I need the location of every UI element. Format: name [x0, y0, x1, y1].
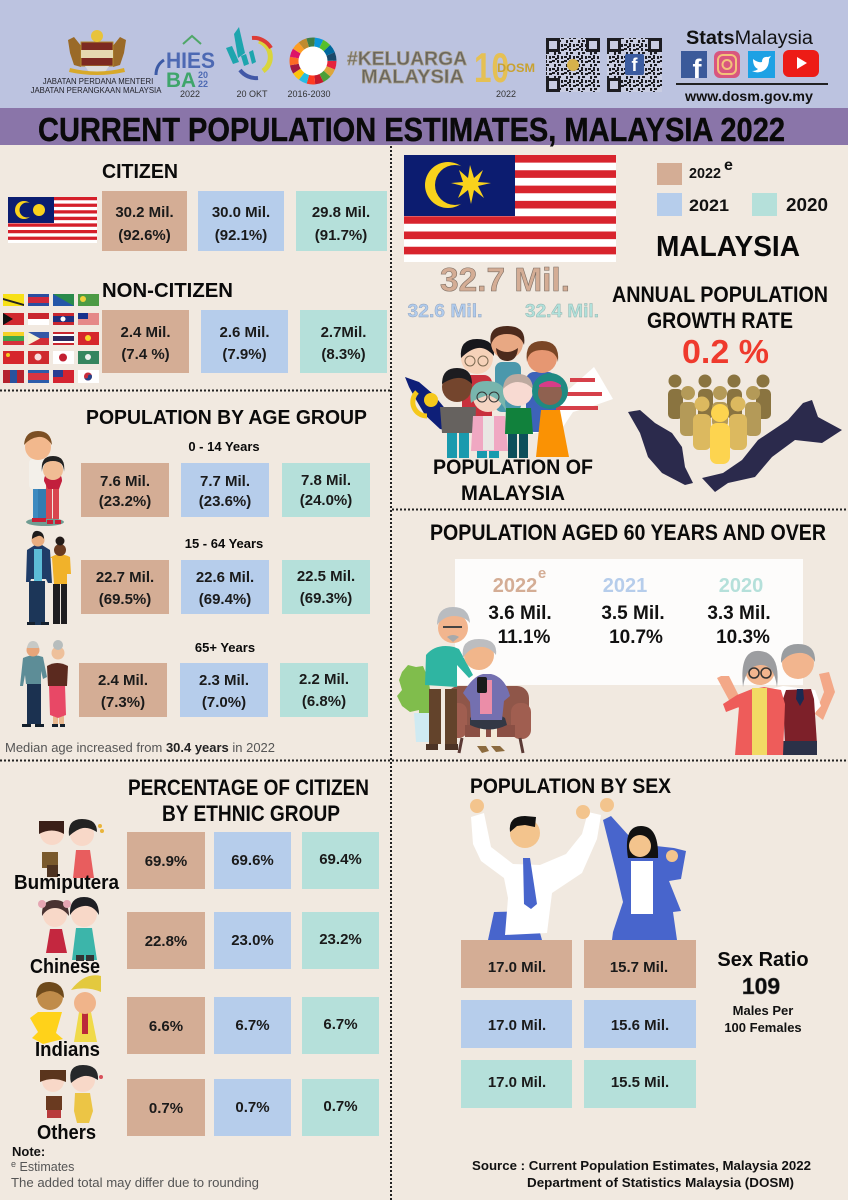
illustration: man cheering: [470, 799, 601, 940]
male 2020: 17.0 Mil.: [488, 1074, 546, 1091]
chinese 2020: 23.2%: [319, 931, 362, 948]
male 2021: 17.0 Mil.: [488, 1017, 546, 1034]
notes: e: [11, 1159, 16, 1169]
indians 2020: 6.7%: [323, 1016, 358, 1033]
logo: Keluarga Malaysia: #KELUARGA: [347, 49, 467, 70]
icon: bumiputera children: [39, 819, 104, 878]
2020 seniors figures: 2020: [719, 575, 763, 597]
non-citizen 2020: 2.7Mil.: [321, 324, 366, 341]
15-64 2020: [282, 560, 370, 614]
QR code: [546, 38, 600, 92]
sex ratio: 109: [742, 973, 780, 999]
notes: [11, 1144, 259, 1190]
female 2020: 15.5 Mil.: [611, 1074, 669, 1091]
bumiputera 2020: [302, 832, 379, 889]
female 2022: [584, 940, 696, 988]
icon: facebook: [681, 51, 707, 84]
logo: HIES BA 2022: BA: [166, 69, 196, 92]
back row: [461, 326, 558, 432]
non-citizen 2020: (8.3%): [321, 346, 366, 363]
2021 seniors figures: [601, 575, 665, 648]
front row: [440, 368, 569, 458]
female 2020: [584, 1060, 696, 1108]
caption: population of malaysia: [433, 456, 593, 505]
15-64 2021: (69.4%): [199, 591, 251, 608]
0-14 2021: 7.7 Mil.: [200, 473, 250, 490]
label: indians: Indians: [35, 1039, 100, 1061]
citizen 2022: 30.2 Mil.: [115, 204, 174, 221]
2021 seniors figures: 10.7%: [609, 627, 663, 648]
bumiputera 2022: [127, 832, 205, 889]
source: Department of Statistics Malaysia (DOSM): [527, 1176, 794, 1190]
citizen 2021: [198, 191, 284, 251]
logo: DOSM 10 years: 10: [474, 44, 509, 91]
heading: BY ETHNIC GROUP: [162, 801, 340, 826]
label: bumiputera: Bumiputera: [14, 872, 120, 894]
citizen 2021: (92.1%): [215, 227, 267, 244]
agency name: JABATAN PERDANA MENTERI: [43, 77, 153, 86]
0-14 2021: [181, 463, 269, 517]
label: others: Others: [37, 1122, 96, 1144]
0-14 2022: (23.2%): [99, 493, 151, 510]
heading: annual growth rate: GROWTH RATE: [647, 308, 793, 333]
2021 seniors figures: 3.5 Mil.: [601, 603, 665, 624]
65+ 2020: [280, 663, 368, 717]
icon: instagram: [714, 51, 740, 78]
legend: e: [724, 157, 733, 174]
15-64 2020: (69.3%): [300, 590, 352, 607]
label: 15-64 years: 15 - 64 Years: [185, 536, 263, 551]
heading: age group: POPULATION BY AGE GROUP: [86, 407, 367, 429]
male 2022: 17.0 Mil.: [488, 959, 546, 976]
female 2021: [584, 1000, 696, 1048]
icon: twitter: [748, 51, 775, 78]
agency name: JABATAN PERANGKAAN MALAYSIA: [31, 86, 162, 95]
growth rate value: 0.2 %: [682, 333, 769, 370]
logo: DOSM 10 years: DOSM: [497, 61, 535, 75]
15-64 2022: (69.5%): [99, 591, 151, 608]
icon: chinese children: [38, 897, 99, 961]
median age note: Median age increased from 30.4 years in 2022: [5, 741, 275, 755]
icon: seniors: [20, 640, 68, 727]
legend: 2021: [689, 196, 729, 215]
citizen 2022: [102, 191, 187, 251]
0-14 2020: [282, 463, 370, 517]
logo: DOSM 10 years: [474, 44, 535, 99]
15-64 2020: 22.5 Mil.: [297, 568, 355, 585]
15-64 2021: [181, 560, 269, 614]
heading: non-citizen: NON-CITIZEN: [102, 280, 233, 302]
logo: HIES BA 2022: HIES: [166, 48, 215, 73]
panel: population by sex: [461, 775, 809, 1108]
panel: population by age group: [5, 407, 370, 755]
notes: Estimates: [16, 1160, 74, 1174]
social block: [676, 28, 828, 104]
2022 seniors figures: [488, 565, 552, 648]
non-citizen 2020: [300, 310, 387, 373]
indians 2021: 6.7%: [235, 1017, 270, 1034]
logo: sustainable development goals wheel: [287, 41, 333, 99]
15-64 2022: 22.7 Mil.: [96, 569, 154, 586]
2022 seniors figures: 3.6 Mil.: [488, 603, 552, 624]
logo: world statistics day 20 OKT: [226, 27, 271, 99]
logo: HIES BA 2022: [156, 36, 215, 99]
65+ 2021: [180, 663, 268, 717]
source: [472, 1159, 811, 1190]
logo: Keluarga Malaysia: MALAYSIA: [361, 67, 464, 88]
65+ 2021: 2.3 Mil.: [199, 672, 249, 689]
caption: population of malaysia: POPULATION OF: [433, 456, 593, 479]
logo: world statistics day 20 OKT: 20 OKT: [236, 89, 268, 99]
panel: malaysia overview: [404, 155, 842, 505]
agency name: [31, 77, 162, 95]
others 2022: [127, 1079, 205, 1136]
non-citizen 2021: [201, 310, 288, 373]
0-14 2022: [81, 463, 169, 517]
2020 seniors figures: 3.3 Mil.: [707, 603, 771, 624]
65+ 2022: 2.4 Mil.: [98, 672, 148, 689]
0-14 2022: 7.6 Mil.: [100, 473, 150, 490]
female 2022: 15.7 Mil.: [610, 959, 668, 976]
others 2020: 0.7%: [323, 1098, 358, 1115]
male 2021: [461, 1000, 572, 1048]
label: 0-14 years: 0 - 14 Years: [188, 439, 260, 454]
2021 seniors figures: 2021: [603, 575, 647, 597]
sex ratio: Males Per: [733, 1003, 793, 1018]
illustration: elderly couple waving: [717, 644, 835, 755]
heading: PERCENTAGE OF CITIZEN: [128, 775, 369, 800]
header band: [0, 0, 848, 108]
others 2020: [302, 1079, 379, 1136]
chinese 2022: 22.8%: [145, 933, 187, 950]
sex ratio: 100 Females: [724, 1020, 802, 1035]
65+ 2022: (7.3%): [101, 694, 145, 711]
source: Source : Current Population Estimates, Malaysia 2022: [472, 1159, 811, 1173]
white panel: [455, 559, 803, 685]
65+ 2021: (7.0%): [202, 694, 246, 711]
icon: malaysia map silhouette: [628, 400, 842, 492]
label: chinese: Chinese: [30, 956, 100, 978]
15-64 2022: [81, 560, 169, 614]
indians 2022: [127, 997, 205, 1054]
logo: sustainable development goals wheel: 2016-2030: [287, 89, 331, 99]
0-14 2020: (24.0%): [300, 492, 352, 509]
elderly man: [425, 607, 473, 750]
0-14 2021: (23.6%): [199, 493, 251, 510]
illustration: woman cheering: [600, 798, 686, 940]
heading: malaysia: MALAYSIA: [656, 231, 800, 263]
65+ 2020: 2.2 Mil.: [299, 671, 349, 688]
chinese 2020: [302, 912, 379, 969]
chinese 2021: [214, 912, 291, 969]
15-64 2021: 22.6 Mil.: [196, 569, 254, 586]
QR code: facebook: f: [632, 55, 638, 75]
icon: facebook: f: [692, 54, 702, 84]
icon: youtube: [783, 50, 819, 77]
65+ 2022: [79, 663, 167, 717]
male 2020: [461, 1060, 572, 1108]
legend: 2020: [786, 195, 828, 215]
citizen 2020: [296, 191, 387, 251]
female 2021: 15.6 Mil.: [611, 1017, 669, 1034]
icon: malaysian flag large: [404, 155, 616, 262]
notes: Note:: [12, 1144, 45, 1159]
heading: annual growth rate: [612, 282, 828, 333]
65+ 2020: (6.8%): [302, 693, 346, 710]
social block: www.dosm.gov.my: [684, 89, 814, 104]
others 2021: [214, 1079, 291, 1136]
citizen 2020: 29.8 Mil.: [312, 204, 370, 221]
citizen 2021: 30.0 Mil.: [212, 204, 270, 221]
chinese 2022: [127, 912, 205, 969]
non-citizen 2022: 2.4 Mil.: [120, 324, 171, 341]
non-citizen 2022: [102, 310, 189, 373]
illustration: people on malaysia map: [405, 326, 613, 458]
legend: [657, 157, 828, 216]
heading: [128, 775, 369, 826]
2022 seniors figures: 11.1%: [498, 627, 551, 648]
logo: HIES BA 2022: 2022: [180, 89, 200, 99]
logo: Keluarga Malaysia: [347, 49, 467, 88]
non-citizen 2022: (7.4 %): [121, 346, 170, 363]
logo: DOSM 10 years: 2022: [496, 89, 516, 99]
icon: adults: [26, 531, 71, 625]
non-citizen 2021: 2.6 Mil.: [219, 324, 270, 341]
icon: others children: [40, 1065, 103, 1123]
label: 65+ years: 65+ Years: [195, 640, 255, 655]
QR code: facebook: [607, 38, 662, 92]
panel: population aged 60 and over: [397, 520, 835, 755]
illustration: elderly couple with sofa: [397, 607, 531, 753]
heading: citizen: CITIZEN: [102, 161, 178, 183]
legend: 2022: [689, 165, 721, 182]
icon: children: [24, 431, 64, 526]
sex ratio: Sex Ratio: [717, 949, 809, 971]
logo: HIES BA 2022: 20: [198, 70, 208, 80]
2022 seniors figures: 2022: [493, 575, 537, 597]
icon: crowd of people: [668, 374, 771, 464]
social block: StatsMalaysia: [686, 28, 813, 49]
bumiputera 2020: 69.4%: [319, 851, 362, 868]
non-citizen 2021: (7.9%): [222, 346, 267, 363]
2020 seniors figures: [707, 575, 771, 648]
male 2022: [461, 940, 572, 988]
panel: non-citizen: [3, 280, 387, 383]
2022 seniors figures: e: [538, 565, 546, 582]
0-14 2020: 7.8 Mil.: [301, 472, 351, 489]
heading: POPULATION BY SEX: [470, 775, 671, 798]
citizen 2020: (91.7%): [315, 227, 367, 244]
indians 2021: [214, 997, 291, 1054]
icon: indian children: [30, 975, 101, 1044]
total population 2020: 32.4 Mil.: [525, 301, 599, 321]
icon: flags of countries grid: [3, 294, 99, 383]
others 2021: 0.7%: [235, 1099, 270, 1116]
indians 2022: 6.6%: [149, 1018, 183, 1035]
sex ratio: [717, 949, 809, 1035]
indians 2020: [302, 997, 379, 1054]
elderly woman: [463, 639, 510, 753]
panel: percentage of citizen by ethnic group: [14, 775, 379, 1144]
panel: citizen: [8, 161, 387, 251]
notes: The added total may differ due to rounding: [11, 1176, 259, 1190]
heading: annual growth rate: ANNUAL POPULATION: [612, 282, 828, 307]
caption: population of malaysia: MALAYSIA: [461, 482, 565, 505]
icon: malaysian coat of arms: [68, 30, 126, 75]
bumiputera 2021: [214, 832, 291, 889]
icon: malaysian flag small: [8, 197, 97, 243]
2020 seniors figures: 10.3%: [716, 627, 770, 648]
citizen 2022: (92.6%): [118, 227, 171, 244]
total population 2021: 32.6 Mil.: [408, 301, 482, 321]
chinese 2021: 23.0%: [231, 932, 274, 949]
others 2022: 0.7%: [149, 1100, 183, 1117]
logo: HIES BA 2022: 22: [198, 79, 208, 89]
bumiputera 2021: 69.6%: [231, 852, 274, 869]
bumiputera 2022: 69.9%: [145, 853, 187, 870]
total population 2022: 32.7 Mil.: [440, 261, 570, 298]
